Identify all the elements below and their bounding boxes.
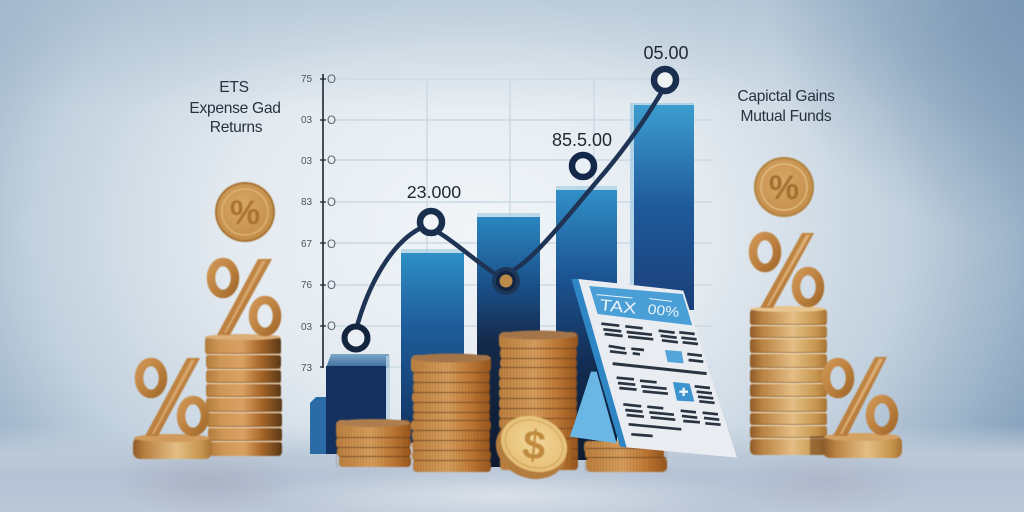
right label: Capictal Gains Mutual Funds: Mutual Funds: [741, 108, 832, 125]
left label: ETS Expense Gad Returns: ETS: [219, 79, 249, 96]
bar 5: [630, 103, 694, 310]
coin stack B: [411, 354, 491, 472]
y axis: O: [327, 321, 336, 333]
dollar coin: [487, 406, 576, 489]
y axis: 67: [301, 239, 313, 250]
y axis: O: [327, 197, 336, 209]
y axis: 75: [301, 74, 313, 85]
right label: Capictal Gains Mutual Funds: Capictal Gains: [737, 88, 835, 105]
tall coin stack: [205, 334, 282, 456]
chart: [301, 43, 712, 467]
document sheet: [578, 279, 737, 458]
small side block: [310, 397, 328, 454]
bar 1: [326, 354, 390, 454]
y axis: O: [327, 115, 336, 127]
y axis: [301, 74, 336, 374]
document rows: [601, 324, 721, 436]
document plus box: [673, 382, 694, 402]
y axis: 83: [301, 197, 313, 208]
y axis: 03: [301, 156, 313, 167]
value label 05.00: 05.00: [643, 43, 689, 63]
coin stack C: [499, 330, 578, 470]
floating percent coin: [215, 182, 275, 242]
point 2: [420, 211, 442, 233]
bar 2: [401, 249, 464, 443]
trend line: [356, 88, 664, 330]
right label: Capictal Gains Mutual Funds: [737, 88, 835, 125]
y axis: 03: [301, 322, 313, 333]
y axis: O: [327, 280, 336, 292]
front coin stacks: [336, 330, 667, 489]
point 4: [572, 155, 594, 177]
point 5: [654, 69, 676, 91]
y axis: 03: [301, 115, 313, 126]
large percent sign: [211, 259, 277, 335]
point 3: [494, 269, 518, 293]
y axis: O: [327, 155, 336, 167]
coin stack A: [336, 419, 411, 467]
value label 23.000: 23.000: [407, 182, 461, 202]
y axis: 76: [301, 280, 313, 291]
coin stack D: [584, 441, 667, 472]
right coin and percent group: [750, 157, 902, 458]
small percent sign: [139, 358, 205, 436]
base disc: [823, 433, 902, 458]
left label: ETS Expense Gad Returns: Returns: [210, 119, 263, 136]
floating percent coin: [754, 157, 814, 217]
large percent sign: [753, 233, 820, 308]
y axis: O: [327, 239, 336, 251]
bar 4: [556, 186, 617, 460]
left coin and percent group: [133, 182, 282, 459]
y axis: O: [327, 74, 336, 86]
tall coin stack: [750, 306, 827, 455]
chart grid: [335, 79, 712, 420]
base disc: [133, 434, 212, 459]
dollar coin: $: [520, 421, 548, 469]
tax header band: TAX: [599, 297, 638, 318]
value label 85.5.00: 85.5.00: [552, 130, 612, 150]
y axis: 73: [301, 363, 313, 374]
tax header band: [589, 286, 692, 325]
floating percent coin: %: [230, 194, 260, 232]
document small blue box: [665, 350, 684, 363]
tax document: [570, 279, 737, 458]
bar 3: [477, 213, 540, 467]
left label: ETS Expense Gad Returns: Expense Gad: [189, 100, 281, 117]
blue wedge: [570, 372, 617, 443]
tax header band: 00%: [647, 301, 680, 320]
small percent sign: [826, 357, 894, 436]
point 1: [344, 326, 368, 350]
left label: ETS Expense Gad Returns: [189, 79, 281, 136]
floating percent coin: %: [769, 169, 799, 207]
document spine: [571, 279, 627, 447]
